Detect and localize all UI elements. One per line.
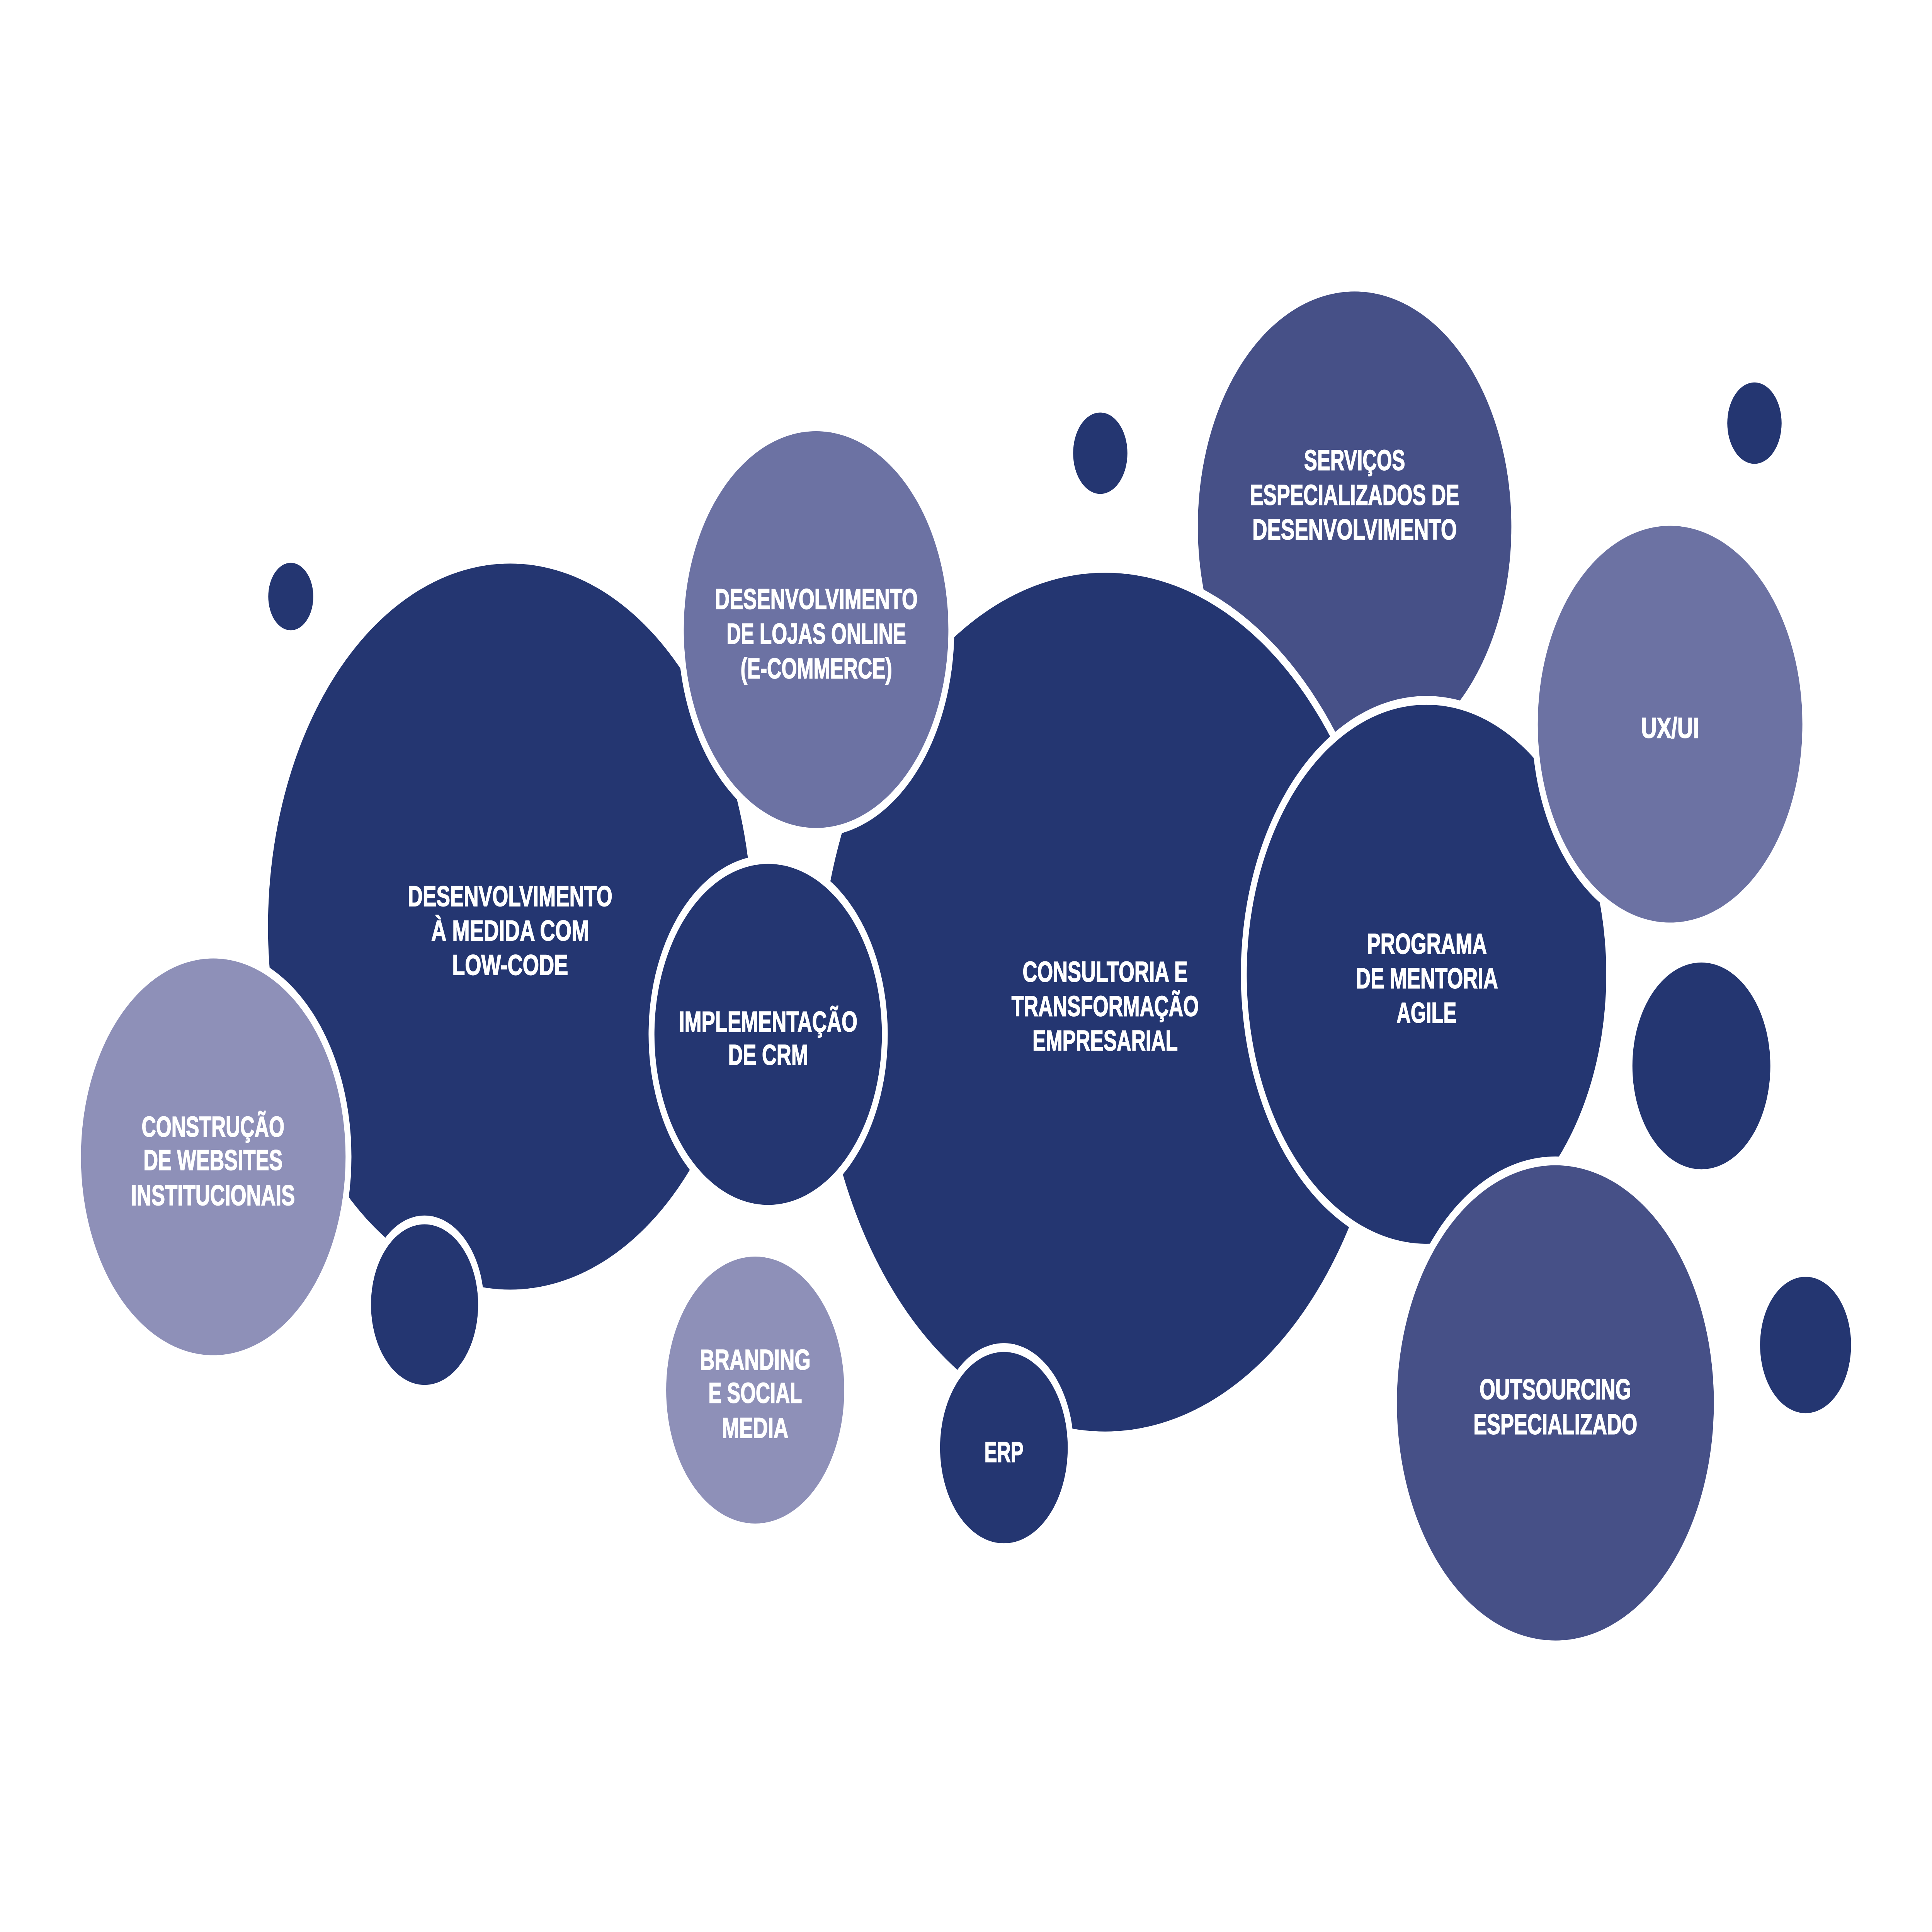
bubble: construção de websites institucionais xyxy=(75,950,351,1364)
bubble: programa de mentoria agile: AGILE xyxy=(1396,997,1456,1029)
bubble: desenvolvimento de lojas online (e-commerce) xyxy=(678,422,954,837)
dot: top left xyxy=(268,563,313,630)
bubble: serviços especializados de desenvolvimento: DESENVOLVIMENTO xyxy=(1252,514,1457,546)
bubble: branding e social media: BRANDING xyxy=(700,1344,811,1376)
bubble: implementação de crm: DE CRM xyxy=(728,1039,808,1071)
bubble: consultoria e transformação empresarial xyxy=(813,564,1397,1440)
bubble: construção de websites institucionais: INSTITUCIONAIS xyxy=(131,1180,295,1212)
bubble: desenvolvimento de lojas online (e-commerce): DE LOJAS ONLINE xyxy=(726,618,906,650)
bubble: ux/ui: UX/UI xyxy=(1641,712,1699,744)
bubble: construção de websites institucionais: CONSTRUÇÃO xyxy=(141,1111,284,1143)
bubble: serviços especializados de desenvolvimento: ESPECIALIZADOS DE xyxy=(1250,480,1459,511)
bubble: desenvolvimento à medida com low-code: LOW-CODE xyxy=(452,949,568,981)
bubble: erp: ERP xyxy=(984,1437,1024,1468)
bubble: branding e social media: E SOCIAL xyxy=(708,1378,802,1409)
bubble: small unlabelled circle xyxy=(365,1216,484,1394)
bubble: consultoria e transformação empresarial: TRANSFORMAÇÃO xyxy=(1012,990,1199,1022)
bubble: erp xyxy=(934,1343,1073,1552)
bubble: desenvolvimento à medida com low-code: À MEDIDA COM xyxy=(431,915,589,947)
bubble: programa de mentoria agile xyxy=(1241,696,1612,1253)
bubble: branding e social media: MEDIA xyxy=(722,1412,789,1444)
bubble: desenvolvimento à medida com low-code xyxy=(268,564,752,1289)
bubble: outsourcing especializado: OUTSOURCING xyxy=(1480,1374,1631,1406)
bubble: programa de mentoria agile: DE MENTORIA xyxy=(1356,963,1498,995)
bubble: outsourcing especializado xyxy=(1391,1156,1720,1649)
bubble: desenvolvimento de lojas online (e-commerce): (E-COMMERCE) xyxy=(740,653,892,685)
bubble: desenvolvimento à medida com low-code: DESENVOLVIMENTO xyxy=(408,881,612,912)
bubble: serviços especializados de desenvolvimento: SERVIÇOS xyxy=(1304,445,1405,476)
bubble: consultoria e transformação empresarial: EMPRESARIAL xyxy=(1032,1025,1178,1057)
dot: right middle xyxy=(1633,963,1770,1169)
bubble: branding e social media xyxy=(666,1257,844,1524)
bubble: implementação de crm: IMPLEMENTAÇÃO xyxy=(679,1005,857,1038)
dot: lower right xyxy=(1760,1277,1851,1413)
bubble: outsourcing especializado: ESPECIALIZADO xyxy=(1473,1408,1637,1440)
bubble: programa de mentoria agile: PROGRAMA xyxy=(1367,928,1487,960)
bubble: serviços especializados de desenvolvimento xyxy=(1198,291,1511,762)
bubble: implementação de crm xyxy=(648,855,888,1214)
bubble: consultoria e transformação empresarial: CONSULTORIA E xyxy=(1023,956,1188,988)
bubble: desenvolvimento de lojas online (e-commerce): DESENVOLVIMENTO xyxy=(715,583,918,616)
dot: top right xyxy=(1727,383,1782,464)
bubble: ux/ui xyxy=(1532,517,1808,931)
dot: top centre xyxy=(1073,413,1128,494)
bubble: construção de websites institucionais: DE WEBSITES xyxy=(143,1145,282,1177)
